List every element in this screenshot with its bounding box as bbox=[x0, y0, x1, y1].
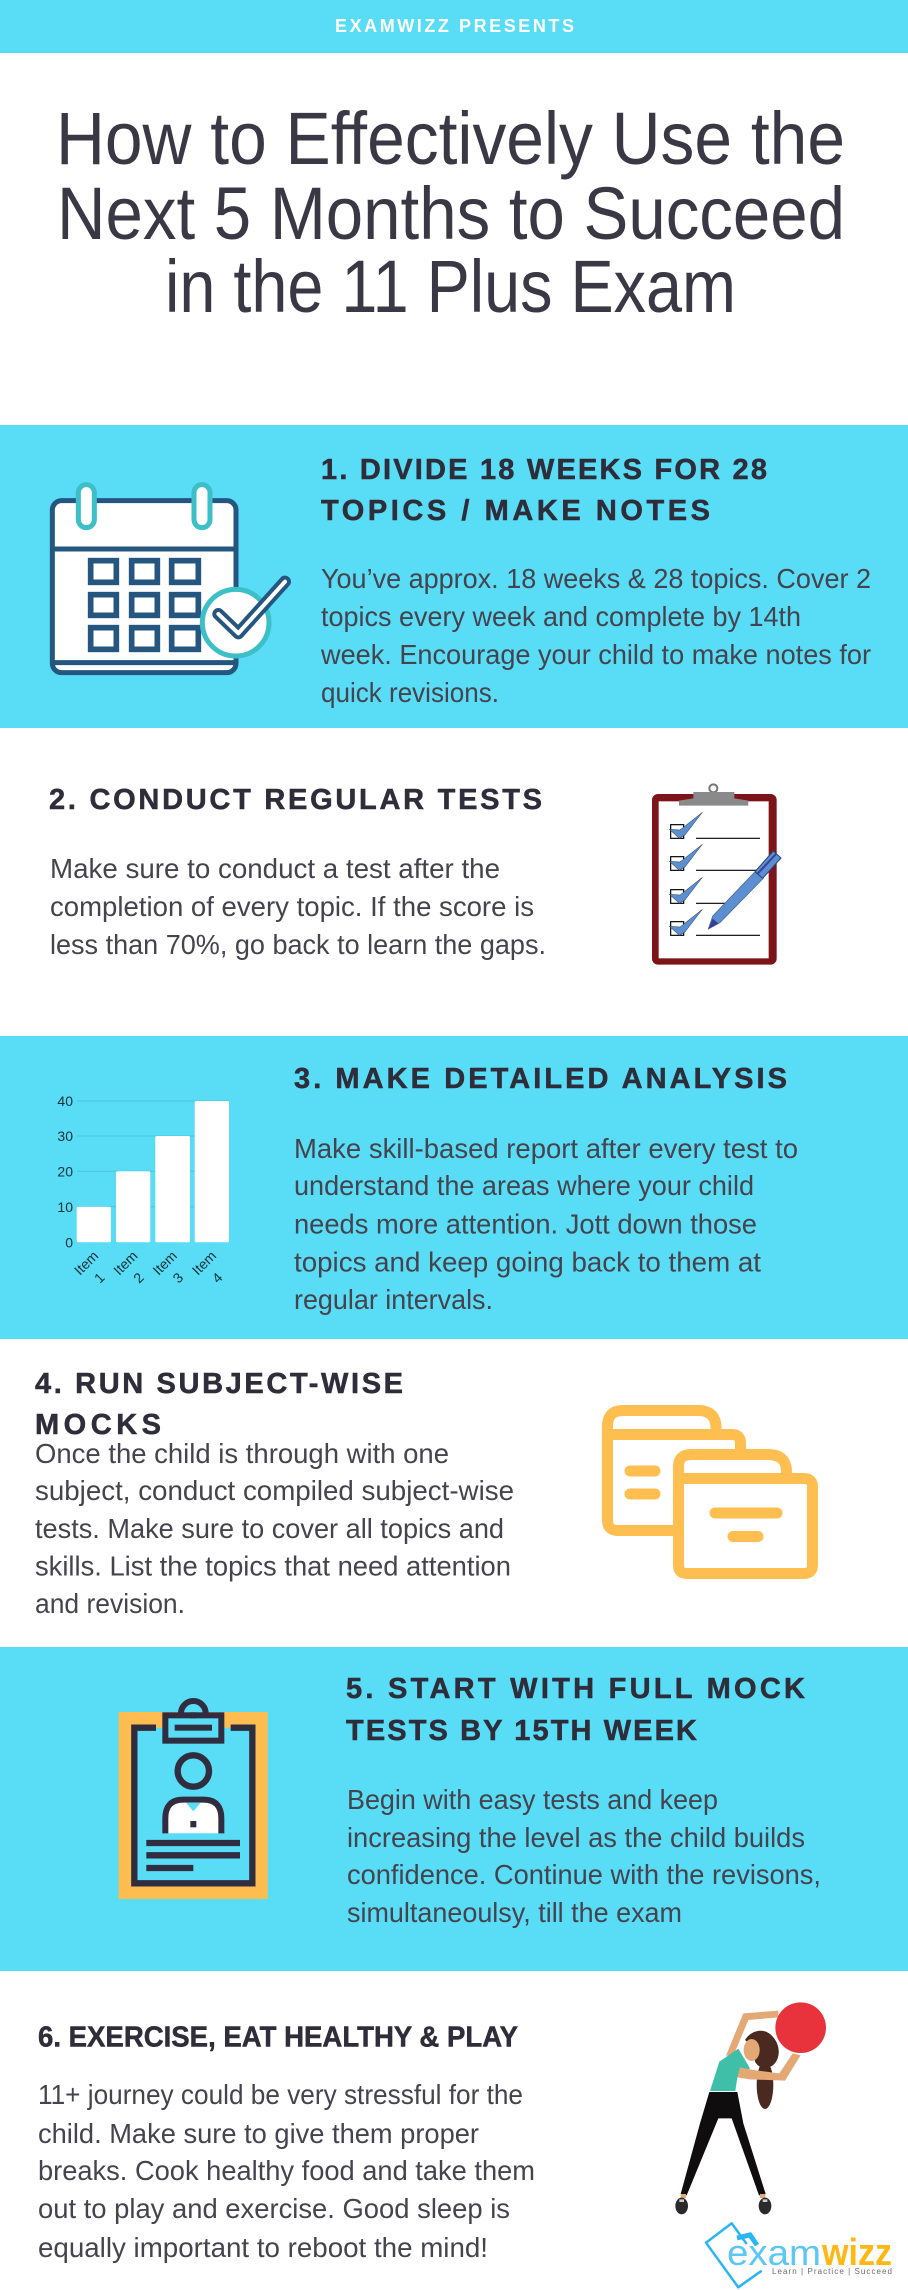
heading: step 3: 3. MAKE DETAILED ANALYSIS bbox=[294, 1063, 787, 1095]
chart x axis labels: Item bbox=[71, 1248, 101, 1278]
logo: examwizz bbox=[706, 2223, 892, 2287]
text: step 6 body: 11+ journey could be very stressful for the bbox=[38, 2079, 523, 2110]
chart bars bbox=[77, 1101, 229, 1242]
text: step 4 body: skills. List the topics that need attention bbox=[35, 1550, 511, 1582]
icon: clipboard with pen bbox=[652, 784, 781, 965]
chart x axis labels: 1 bbox=[91, 1269, 108, 1286]
text: step 1 body: quick revisions. bbox=[321, 677, 499, 708]
text: step 4 body: Once the child is through with one bbox=[35, 1438, 449, 1469]
heading: step 1: TOPICS / MAKE NOTES bbox=[321, 495, 710, 527]
logo: examwizz: wizz bbox=[821, 2232, 892, 2274]
heading: step 5: 5. START WITH FULL MOCK bbox=[346, 1673, 805, 1705]
panel: step 3 bbox=[0, 1036, 908, 1339]
icon: clipboard with profile bbox=[119, 1701, 268, 1899]
text: step 2 body bbox=[50, 853, 546, 960]
text: step 1 body: topics every week and complete by 14th bbox=[321, 601, 801, 632]
heading: step 4: MOCKS bbox=[35, 1409, 161, 1441]
heading: step 6: 6. EXERCISE, EAT HEALTHY & PLAY bbox=[38, 2022, 518, 2054]
text: step 6 body: child. Make sure to give them proper bbox=[38, 2118, 479, 2149]
title: in the 11 Plus Exam bbox=[165, 245, 736, 328]
text: step 3 body: regular intervals. bbox=[294, 1284, 493, 1315]
text: step 6 body: breaks. Cook healthy food and take them bbox=[38, 2155, 535, 2186]
chart y axis labels: 40 bbox=[57, 1093, 73, 1109]
heading: step 5: TESTS BY 15TH WEEK bbox=[346, 1715, 697, 1747]
text: step 3 body: understand the areas where your child bbox=[294, 1170, 754, 1201]
text: step 6 body bbox=[38, 2079, 535, 2263]
chart y axis labels: 0 bbox=[65, 1234, 73, 1250]
text: step 3 body: topics and keep going back to them at bbox=[294, 1246, 761, 1278]
text: step 4 body: tests. Make sure to cover all topics and bbox=[35, 1513, 504, 1544]
chart y axis labels: 20 bbox=[57, 1164, 73, 1180]
logo: examwizz: exam bbox=[727, 2232, 821, 2273]
text: step 5 body: Begin with easy tests and keep bbox=[347, 1784, 718, 1815]
heading: step 2: 2. CONDUCT REGULAR TESTS bbox=[49, 784, 542, 816]
text: step 5 body: simultaneoulsy, till the exam bbox=[347, 1897, 682, 1928]
chart y axis labels bbox=[57, 1093, 73, 1250]
icon: folders bbox=[608, 1410, 812, 1574]
text: step 1 body: You’ve approx. 18 weeks & 28 topics. Cover 2 bbox=[321, 563, 871, 594]
text: step 3 body bbox=[294, 1133, 798, 1315]
panel: step 2 bbox=[49, 784, 781, 965]
chart x axis labels bbox=[71, 1248, 226, 1286]
text: step 6 body: equally important to reboot the mind! bbox=[38, 2232, 488, 2263]
top banner: EXAMWIZZ PRESENTS bbox=[335, 16, 574, 36]
title: Next 5 Months to Succeed bbox=[57, 172, 845, 255]
chart x axis labels: 4 bbox=[209, 1269, 226, 1286]
text: step 2 body: Make sure to conduct a test after the bbox=[50, 853, 500, 884]
chart x axis labels: 2 bbox=[130, 1269, 147, 1286]
panel: step 1 bbox=[0, 425, 908, 728]
chart y axis labels: 10 bbox=[57, 1199, 73, 1215]
bar chart bbox=[57, 1093, 229, 1286]
icon: woman exercising with ball bbox=[675, 2002, 826, 2214]
top banner bbox=[0, 0, 908, 53]
text: step 4 body: and revision. bbox=[35, 1588, 185, 1619]
chart x axis labels: Item bbox=[149, 1248, 180, 1278]
title: How to Effectively Use the bbox=[56, 97, 845, 180]
text: step 2 body: less than 70%, go back to learn the gaps. bbox=[50, 929, 546, 960]
text: step 5 body: confidence. Continue with the revisons, bbox=[347, 1859, 821, 1890]
heading: step 1: 1. DIVIDE 18 WEEKS FOR 28 bbox=[321, 454, 767, 486]
panel: step 4 bbox=[35, 1368, 812, 1619]
text: step 6 body: out to play and exercise. Good sleep is bbox=[38, 2193, 510, 2224]
heading: step 5 bbox=[346, 1673, 805, 1747]
chart x axis labels: Item bbox=[110, 1248, 141, 1278]
heading: step 4: 4. RUN SUBJECT-WISE bbox=[35, 1368, 403, 1400]
text: step 4 body bbox=[35, 1438, 514, 1619]
chart x axis labels: Item bbox=[189, 1248, 219, 1278]
text: step 3 body: Make skill-based report after every test to bbox=[294, 1133, 798, 1164]
text: step 3 body: needs more attention. Jott down those bbox=[294, 1208, 757, 1240]
panel: step 6 bbox=[38, 2002, 892, 2287]
text: step 2 body: completion of every topic. If the score is bbox=[50, 891, 534, 922]
chart x axis labels: 3 bbox=[169, 1269, 186, 1286]
text: step 1 body: week. Encourage your child to make notes for bbox=[320, 639, 871, 670]
icon: calendar with check bbox=[52, 485, 285, 673]
text: step 5 body: increasing the level as the child builds bbox=[347, 1822, 805, 1853]
text: step 1 body bbox=[320, 563, 871, 708]
panel: step 5 bbox=[0, 1647, 908, 1971]
heading: step 1 bbox=[321, 454, 767, 527]
chart y axis labels: 30 bbox=[57, 1128, 73, 1144]
text: step 5 body bbox=[347, 1784, 821, 1928]
heading: step 4 bbox=[35, 1368, 403, 1441]
text: step 4 body: subject, conduct compiled subject-wise bbox=[35, 1475, 514, 1506]
title bbox=[56, 97, 845, 328]
logo: examwizz: Learn | Practice | Succeed bbox=[772, 2267, 892, 2276]
